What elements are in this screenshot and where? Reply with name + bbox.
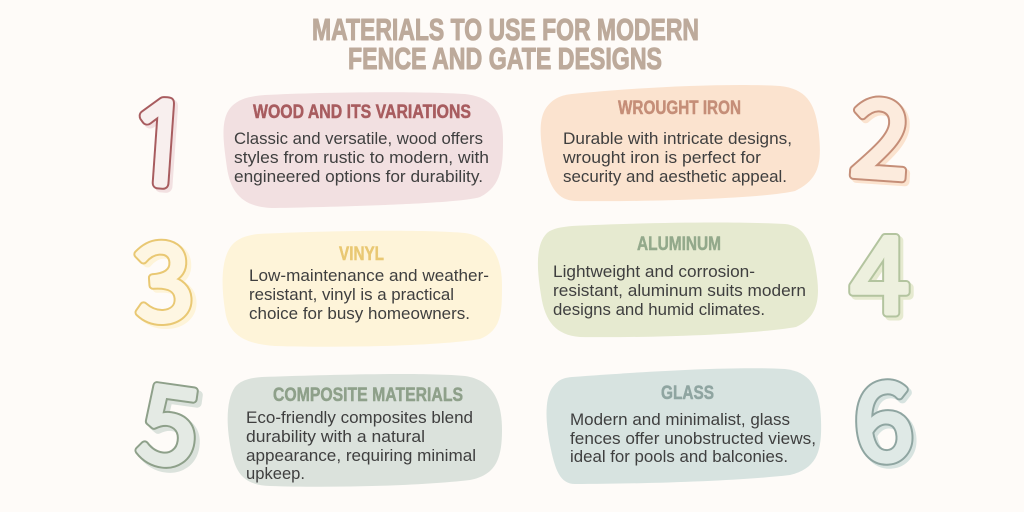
panel: aluminum: ALUMINUM [637, 234, 721, 255]
panel: vinyl [223, 231, 502, 347]
panel: wood and its variations: styles from rustic to modern, with [234, 149, 489, 167]
title [312, 12, 699, 76]
panel: glass: Modern and minimalist, glass [570, 411, 790, 429]
panel: vinyl: choice for busy homeowners. [249, 305, 470, 323]
title: MATERIALS TO USE FOR MODERN [312, 12, 699, 47]
number 5: 5 [131, 337, 210, 498]
panel: glass [546, 368, 821, 484]
title: FENCE AND GATE DESIGNS [348, 41, 662, 76]
panel: wood and its variations: WOOD AND ITS VARIATIONS [253, 102, 471, 123]
panel: composite materials: durability with a natural [246, 428, 425, 446]
panel: wood and its variations: engineered options for durability. [234, 168, 483, 186]
panel: aluminum: designs and humid climates. [553, 301, 765, 319]
panel: composite materials: Eco-friendly composites blend [246, 409, 473, 427]
panel: glass: ideal for pools and balconies. [570, 448, 788, 466]
number 1: 1 [122, 87, 197, 203]
number 2: 2 [846, 52, 916, 210]
panel: wrought iron: wrought iron is perfect for [562, 149, 762, 167]
panel: composite materials: COMPOSITE MATERIALS [273, 385, 463, 406]
panel: wrought iron: WROUGHT IRON [618, 98, 741, 119]
number 2: 2 [849, 55, 919, 213]
number 6: 6 [851, 338, 921, 496]
number 3: 3 [128, 195, 198, 353]
number 5: 5 [131, 337, 210, 498]
number 1: 1 [125, 90, 200, 206]
panel: wrought iron [541, 85, 820, 201]
number 3: 3 [132, 198, 202, 356]
number 3: 3 [128, 195, 198, 353]
panel: aluminum: resistant, aluminum suits modern [553, 282, 806, 300]
panel: vinyl: resistant, vinyl is a practical [249, 286, 454, 304]
panel: composite materials [228, 374, 502, 487]
number 4: 4 [851, 190, 909, 344]
panel: wood and its variations: Classic and versatile, wood offers [234, 130, 483, 148]
panel: wood and its variations [223, 92, 503, 208]
number 1: 1 [122, 87, 197, 203]
panel: glass: GLASS [661, 383, 714, 404]
panel: aluminum [538, 223, 818, 337]
panel: vinyl: VINYL [339, 244, 384, 265]
panel: glass: fences offer unobstructed views, [570, 430, 816, 448]
number 4: 4 [851, 190, 909, 344]
panel: wrought iron: Durable with intricate designs, [563, 130, 792, 148]
panel: vinyl: Low-maintenance and weather- [249, 267, 489, 285]
number 6: 6 [848, 335, 918, 493]
number 2: 2 [846, 52, 916, 210]
number 6: 6 [848, 335, 918, 493]
panel: wrought iron: security and aesthetic appeal. [563, 168, 787, 186]
panel: composite materials: upkeep. [246, 465, 305, 483]
panel: composite materials: appearance, requiring minimal [246, 447, 476, 465]
panel: aluminum: Lightweight and corrosion- [553, 263, 755, 281]
number 4: 4 [854, 193, 912, 347]
number 5: 5 [135, 341, 214, 502]
